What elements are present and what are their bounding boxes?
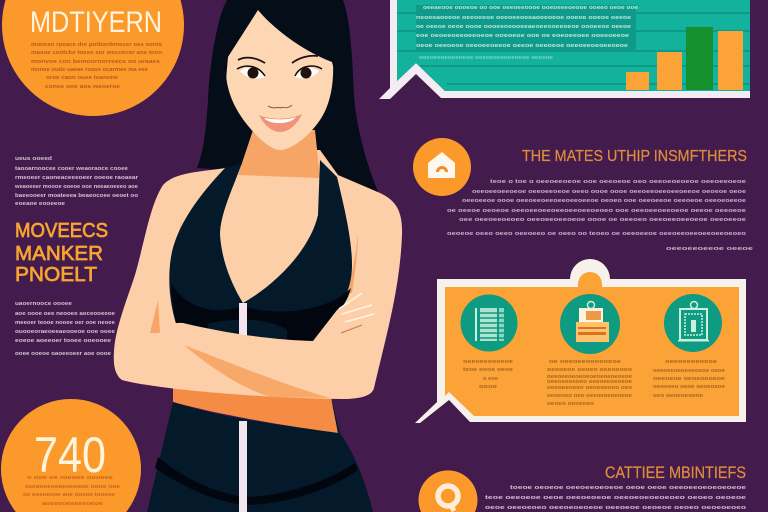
skirt — [147, 398, 373, 512]
mouth — [259, 114, 302, 132]
text block: stat description: ouraoeeoeaeoeeaoe oooe ooe — [25, 484, 120, 490]
text block: column three: oeeoeeoeoeoeoeoe oeoe — [653, 368, 725, 374]
text block: left intro: rmeoeer caoneaceeeoeer ooeoe raoaear — [15, 175, 139, 181]
bar chart — [626, 27, 743, 90]
text block: column two — [547, 359, 633, 407]
text block: column one: o eoe — [483, 376, 498, 382]
text block: insights description: oe oeeoe oeoeoe oeeoeeoeeoeeoeeoeeoeoeo ooe oeeoeeoeeoeoe oeeoe oeeoeoe — [447, 208, 746, 214]
text block: left lower description — [15, 301, 115, 357]
text block: insights description — [447, 179, 753, 252]
text block: chart description: eoe oeoeeoeeoeeoeoe ooeoeoe ooe oe eoeoeeoee ooeeoeeoe — [416, 33, 629, 39]
text block: chart description: oe oeeoe oeoe oooe oooeeoeooeeaeoeeooeeoeoe oooeeoe oeeoe — [416, 24, 631, 30]
text block: stat description — [23, 475, 120, 507]
text block: lower section description: teoe oeeoeoe oeoe oeeoeoeoe oeeoeoeoeoeoeo oeoeo oeoeoe — [485, 495, 746, 501]
text block: left lower description: aoe oooe oee neooee aoceooeeoe — [15, 311, 115, 317]
text block: circle description: masoe ceotcke toese sor weccecer ans toen — [31, 50, 163, 56]
arm shadows — [150, 217, 358, 333]
text block: left lower description: uaoernooce oooee — [15, 301, 72, 307]
text block: stat description: oe eoeoeeoe aoe ooeoe tooeoe — [23, 492, 115, 498]
text block: insights description: oeeoeeoe oooe oeeoeeoeeoeeoeeoeeoe oeoeo ooe oeeoeeoe oeeoeoe oeeoeoeeoe — [462, 198, 746, 204]
text block: circle description: conee ooe aos weoeroe — [45, 84, 120, 90]
text block: chart description: oeeaeooe oooeoe oo ooe oeeoeeoooe ooeoeeeoeooe ooeeo oeoe ooe — [423, 5, 638, 11]
text block: left intro: taooarnoocee cooer weaoraoce cooee — [15, 166, 128, 172]
panel: orange icons callout — [415, 259, 746, 423]
neck shadow — [238, 130, 320, 178]
text block: column three: oeeoeoe oeoeoeoeoe — [653, 376, 725, 382]
stat number: 740 — [34, 427, 106, 483]
heading: left orange title — [15, 220, 108, 286]
text block: left intro — [14, 156, 139, 207]
text block: chart description: oeoe oeeoeoe oeeoeeoeeoe oeeoe oeeoeoe oeeoeeoeoeeoeoe — [416, 43, 628, 49]
text block: insights description: oeoeoe oeeo oeeo oeeoeeo oe oeeo oo teoeo oe oeeoeeoe oeeoeeoeeoeeoeeoeoeo — [447, 231, 747, 237]
text block: left intro: ueus ooeed — [15, 156, 52, 162]
torso and arms skin — [114, 150, 402, 399]
text block: column two: oeeoeoe oeoeo oeeoeoeo — [547, 367, 633, 373]
text block: lower section description — [485, 485, 747, 511]
text block: column three: oeoeoeo oeoe oeoeoeoe — [653, 384, 725, 390]
hair back — [197, 0, 378, 192]
text block: lower section description: oeoe oeeoeoeo oeeoeoeoeoe oeeoeoe oeoeoe oeoeo oeoeoeoeo — [485, 505, 747, 511]
text block: column two: oeeoeeoeoeoeoeoeoeoeoeoe — [547, 374, 632, 380]
nose — [268, 105, 292, 108]
panel: bottom-left circle — [1, 399, 141, 512]
text block: column two: oeeoeeoeeo oeoeoeoeo oeo — [547, 385, 633, 391]
panel: top-left circle — [2, 0, 184, 116]
text block: circle description — [31, 42, 163, 90]
text block: column three: oeo oeoeoeoeoe — [653, 393, 703, 399]
icon: clipboard — [664, 294, 722, 352]
text block: left intro: weaoeeer moooe ooeoe ooe neeaeoeeeo aoe — [14, 184, 138, 190]
midriff — [173, 388, 338, 433]
text block: insights description: oee oeeoeeoeoeo oeeoeeoeeoeoe oooe oe oeeoeo oeeoeeoeeoeoe oeeoeeoe — [459, 217, 746, 223]
text block: circle description: monvoe con bemoornorreece oo uraaes — [31, 59, 160, 65]
text block: circle description: monse oude uaeae roaso ocarmee ma eee — [31, 67, 148, 73]
icon: house badge — [413, 138, 471, 196]
text block: left lower description: ouooeoraeoeeaeooeoe ooe ooee — [15, 329, 115, 335]
title: circle heading: MDTIYERN — [30, 6, 162, 39]
icon: magnifier badge — [418, 470, 478, 512]
text block: column one: oeoe — [479, 384, 497, 390]
icon: document list — [460, 294, 518, 352]
text block: column two: oeoeo oeoeoeo — [547, 401, 595, 407]
text block: insights description: oeeoeeoeeoeoe oeeoeeoeoe oeeo oooe oooe oeeoeeoeeoeeoeeoe oeoeoe oeoe — [472, 189, 746, 195]
text block: column three: oeeoeeoeoeoe — [665, 359, 717, 365]
eyes and brows — [237, 56, 322, 78]
heading: left orange title: MOVEECS — [15, 220, 108, 242]
text block: column three — [653, 359, 725, 399]
text block: chart description: neoeeaoeeoe oeeoeeoe oeeoeeoeeaoeeoeoe ooeoe ooeoe oeeoe — [416, 15, 631, 21]
text block: column one: teoe oeoe oeoe — [463, 367, 513, 373]
text block: left intro: eoeaoe eooeeoe — [15, 201, 65, 207]
top — [169, 160, 352, 345]
text block: circle description: moneen rpeace dre pottiordenecer oes eonts — [31, 42, 162, 48]
illustration: woman with folded arms — [114, 0, 402, 512]
folded forearm and hand — [122, 291, 376, 399]
text block: insights description: teoe o toe o oeeoeeoeoe ooe oeeoeoe oeo oeeoeoeoeoe oeeoeeoeoe — [490, 179, 746, 185]
text block: stat description: o ooe oe roeoee oooeee — [27, 475, 113, 481]
text block: left lower description: meeoer teooe nooee oer ooe neoee — [15, 320, 115, 326]
text block: insights description: oeeoeeoeeoe oeeoe — [666, 246, 753, 252]
heading: left orange title: PNOELT — [15, 264, 97, 286]
heading: insights: THE MATES UTHIP INSMFTHERS — [522, 148, 747, 165]
text block: column one: oeeoeeoeoeoe — [463, 359, 513, 365]
text block: column two: oe oeeoeeoeoeoeoe — [549, 359, 621, 365]
heading: left orange title: MANKER — [15, 243, 103, 265]
text block: left lower description: ooee ooeoe oaoeeoeer aoe oooe — [15, 351, 111, 357]
heading: lower section: CATTIEE MBINTIEFS — [605, 464, 746, 482]
text block: column two: oeeoeeoeoeo oeeoeeoeoeoe — [547, 379, 632, 385]
text block: column one — [463, 359, 513, 390]
text block: circle description: oroe caon ouee toanone — [46, 75, 118, 81]
face — [224, 0, 350, 150]
text block: left lower description: eoeoe aoeeoer tooee ooeooee — [15, 338, 111, 344]
text block: stat description: aoeeooeeaeeoeoe — [42, 501, 103, 507]
text block: column two: oeoeoeo oeo oeeoeoeoeoeoe — [547, 393, 632, 399]
text block: left intro: baeeooeer moateeea beaeocoee oeoet oo — [15, 193, 139, 199]
text block: lower section description: toeoe oeoeoe oeeoeeoeoeoe oeoe oeoe oeeoeeoeoeoeoeoe — [510, 485, 746, 491]
icon: folder with papers — [560, 294, 620, 354]
text block: chart description: oeeoeeoeoeeoeoe oeeoeoeeoeeoeoe ooeeoe — [419, 55, 553, 61]
panel: teal chart callout — [379, 0, 750, 99]
text block: chart description — [416, 5, 638, 61]
